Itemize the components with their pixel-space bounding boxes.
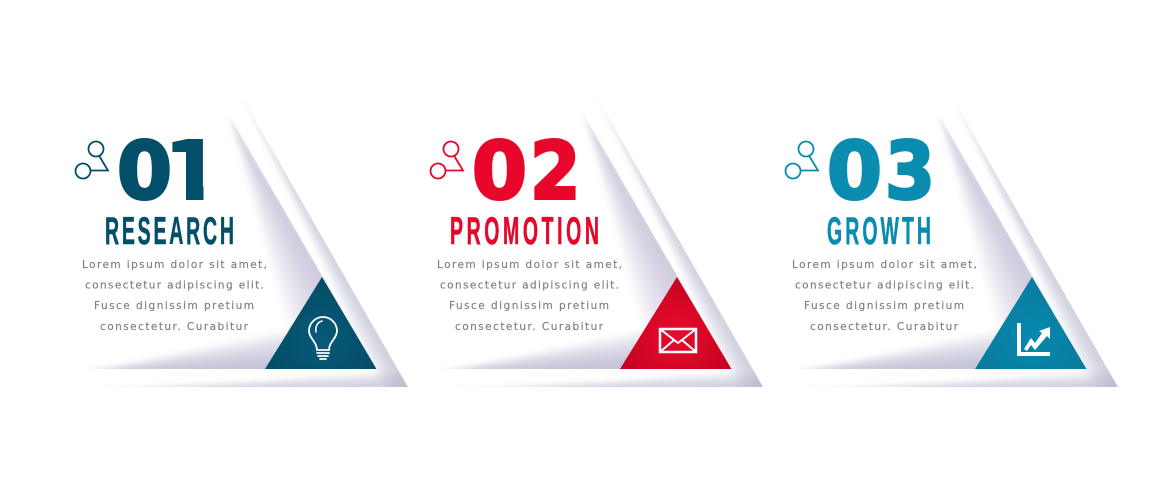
number 02: 2 — [530, 126, 580, 218]
paper triangle: growth — [785, 94, 1130, 421]
number 01: 1 — [165, 126, 220, 218]
text block: research: Lorem ipsum dolor sit amet, — [82, 259, 267, 271]
corner triangle: growth — [975, 277, 1086, 369]
icon: connected nodes, growth — [786, 142, 818, 178]
panel: research — [74, 114, 408, 387]
paper triangle: promotion — [430, 94, 775, 421]
icon: connected nodes, promotion — [430, 142, 463, 178]
text block: promotion: Fusce dignissim pretium — [449, 300, 609, 312]
number 02: 0 — [472, 126, 527, 218]
heading: growth: GROWTH — [827, 209, 931, 253]
icon: connected nodes, research — [76, 142, 108, 178]
text block: promotion — [437, 259, 622, 333]
number 02 — [472, 126, 580, 218]
corner triangle: promotion — [620, 277, 732, 369]
number 03 — [827, 126, 935, 218]
text block: promotion: consectetur. Curabitur — [455, 321, 604, 333]
paper triangle: research — [75, 94, 420, 421]
text block: research: Fusce dignissim pretium — [94, 300, 254, 312]
text block: growth: Lorem ipsum dolor sit amet, — [792, 259, 977, 271]
number 03: 0 — [827, 126, 882, 218]
text block: research: consectetur. Curabitur — [100, 321, 249, 333]
panel: promotion — [430, 94, 775, 421]
text block: growth: consectetur adipiscing elit. — [795, 280, 974, 292]
text block: promotion: consectetur adipiscing elit. — [440, 280, 619, 292]
number 01: 0 — [117, 126, 172, 218]
corner triangle: research — [265, 277, 376, 369]
text block: growth: Fusce dignissim pretium — [804, 300, 964, 312]
icon: light bulb — [309, 317, 337, 359]
heading: research: RESEARCH — [105, 209, 234, 253]
icon: growth chart — [1017, 323, 1050, 356]
text block: growth: consectetur. Curabitur — [810, 321, 959, 333]
number 01 — [119, 138, 204, 201]
text block: research: consectetur adipiscing elit. — [85, 280, 264, 292]
panel: growth — [785, 94, 1130, 421]
text block: promotion: Lorem ipsum dolor sit amet, — [437, 259, 622, 271]
icon: envelope — [660, 329, 696, 352]
heading: promotion: PROMOTION — [450, 209, 599, 253]
text block: research — [82, 259, 267, 333]
text block: growth — [792, 259, 977, 333]
number 03: 3 — [885, 126, 935, 218]
